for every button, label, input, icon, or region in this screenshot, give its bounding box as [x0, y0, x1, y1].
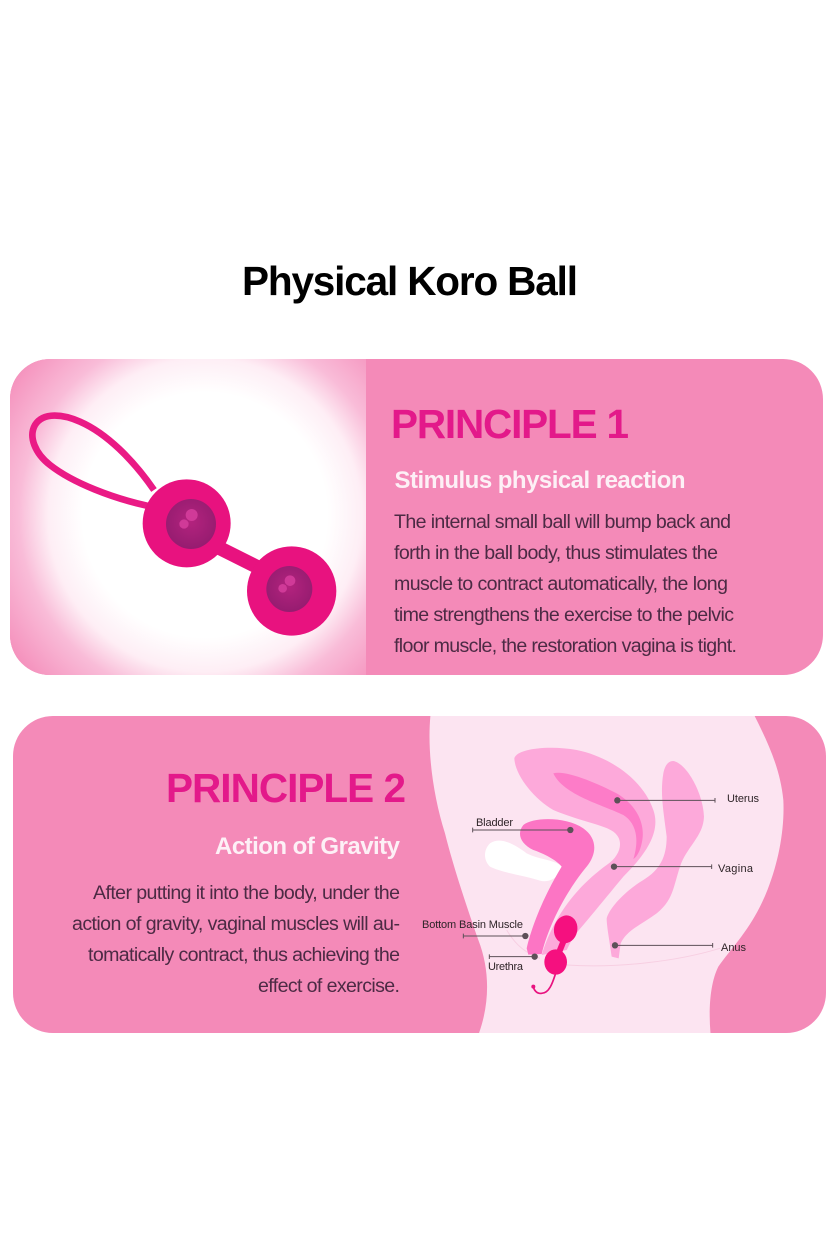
text block: principle 1 description: floor muscle, the restoration vagina is tight. — [394, 635, 737, 657]
labels: anatomy: Bottom Basin Muscle — [422, 919, 523, 931]
text block: principle 1 description: muscle to contract automatically, the long — [394, 573, 728, 595]
heading: principle 1: PRINCIPLE 1 — [391, 401, 629, 447]
anatomy diagram — [430, 713, 784, 1035]
photo background glow — [10, 359, 366, 675]
labels: anatomy: Vagina — [718, 863, 754, 875]
panel: principle 1 — [10, 359, 823, 675]
leader lines — [463, 798, 715, 959]
labels: anatomy: Urethra — [488, 961, 524, 973]
text block: principle 1 description: The internal small ball will bump back and — [394, 511, 731, 533]
title: Physical Koro Ball — [242, 258, 578, 304]
text block: principle 2 description: action of gravity, vaginal muscles will au- — [72, 913, 400, 935]
icon: koro ball product — [32, 416, 336, 636]
body silhouette — [430, 713, 784, 1035]
text block: principle 1 description: time strengthens the exercise to the pelvic — [394, 604, 734, 626]
perineum line — [507, 930, 720, 966]
heading: principle 2: PRINCIPLE 2 — [166, 765, 406, 811]
rectum — [607, 761, 704, 958]
text block: principle 2 description: effect of exercise. — [258, 975, 400, 997]
text block: principle 1 description — [394, 511, 737, 657]
text block: principle 2 description: After putting it into the body, under the — [93, 882, 400, 904]
subheading: action of gravity: Action of Gravity — [215, 833, 401, 860]
text block: principle 2 description — [72, 882, 400, 997]
subheading: stimulus physical reaction: Stimulus physical reaction — [394, 467, 686, 494]
icon: koro balls inserted — [531, 913, 580, 993]
marker dots — [522, 797, 620, 960]
panel: principle 2 — [13, 713, 826, 1035]
labels: anatomy: Anus — [721, 942, 746, 954]
labels: anatomy: Uterus — [727, 793, 760, 805]
bladder and urethra — [520, 819, 594, 955]
labels: anatomy: Bladder — [476, 817, 513, 829]
text block: principle 2 description: tomatically contract, thus achieving the — [88, 944, 400, 966]
labels: anatomy — [422, 793, 760, 973]
uterus and vagina — [514, 748, 655, 955]
text block: principle 1 description: forth in the ball body, thus stimulates the — [394, 542, 718, 564]
pubic bone — [485, 841, 562, 881]
uterus cavity — [553, 773, 643, 859]
